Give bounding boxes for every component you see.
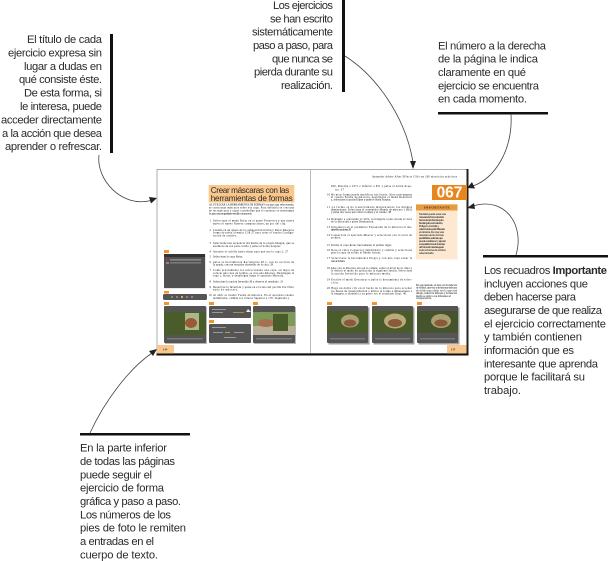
left page body text: Seleccione la opción Invertida 30 y observe el resultado. 31 bbox=[213, 280, 284, 283]
left page body text: nada de máscara. bbox=[213, 289, 238, 292]
callout: bottom step strip: ejercicio de forma bbox=[80, 483, 165, 495]
left page body text: Arrastre el cubillo hasta situar para que sea la capa 2. 27 bbox=[213, 250, 289, 254]
important callout box: Rectángulo redondeado, bbox=[419, 221, 443, 225]
arrow: to right page header bbox=[345, 56, 416, 169]
left page body text: Cuando en un ajuste de la composición inicial y Rotar máscaras bbox=[213, 229, 294, 232]
callout: bottom step strip: a entradas en el bbox=[80, 536, 154, 548]
important callout box: en la barra. Es muy una bbox=[419, 230, 445, 234]
right page body text bbox=[327, 185, 413, 296]
callout: step by step bbox=[252, 0, 345, 92]
callout: exercise number: claramente en qué bbox=[438, 67, 526, 79]
right page body text: 12 Rodando e ajustando al 20%, rectángulo todos desde el área bbox=[327, 218, 413, 221]
left page body text: Al abrir el cuadro Forma de máscara. En el apartado Cuadro bbox=[213, 294, 295, 297]
left page title bbox=[209, 185, 294, 203]
callout: important boxes: Los recuadros Importante bbox=[484, 265, 607, 277]
left page number tab bbox=[157, 345, 174, 354]
important callout box: de Forma de máscara, ajuste bbox=[419, 245, 445, 249]
left page body text: Desactive la Invertida y pulse en el icono del pocillo Por filtro bbox=[213, 286, 295, 289]
important callout box: en aquella forma de máscara bbox=[419, 242, 446, 246]
left page body text: delimitador, cambie los valores Superior a 170, Izquierda y bbox=[213, 297, 290, 300]
left page body text: 5 bbox=[210, 256, 212, 258]
left page body text: pulse la herramienta Rectángulo 28 y, con su sección de bbox=[213, 261, 295, 264]
screenshot: inverted mask on photo bbox=[253, 302, 296, 344]
callout: important boxes: trabajo. bbox=[484, 385, 521, 397]
callout: bottom step strip: cuerpo de texto. bbox=[80, 549, 158, 561]
side caption: En este ajustado, el área con la máscara bbox=[416, 284, 458, 287]
right page body text: la opción Invertida para la máscara media. bbox=[331, 272, 391, 275]
right page body text: 19 Escribe el modo Desaturar y pulse la herramienta de selec- bbox=[327, 278, 412, 282]
arrow: to page bottom bbox=[90, 349, 157, 433]
callout: bottom step strip: gráfica y paso a paso. bbox=[80, 496, 181, 508]
screenshot: oval mask 3 bbox=[417, 302, 460, 344]
important callout box: máscara de forma desde la bbox=[419, 215, 445, 219]
screenshot: oval mask 1 bbox=[327, 302, 370, 344]
left page body text: colocar una capa de formas, se crea una máscara. Despliegue la bbox=[213, 272, 295, 275]
callout: exercise title: De esta forma, si bbox=[24, 88, 102, 100]
left page body text: nueva el nuevo Nuevas composiciones, un por del clip. bbox=[213, 222, 286, 225]
callout: important boxes: asegurarse de que realiza bbox=[484, 305, 603, 317]
callout: important boxes: deben hacerse para bbox=[484, 292, 577, 304]
side caption bbox=[416, 284, 458, 300]
important callout box bbox=[416, 204, 458, 260]
important callout box: seleccione la opción Máscara bbox=[419, 227, 446, 231]
callout: exercise title bbox=[1, 34, 113, 153]
exercise number box: 067 bbox=[437, 185, 462, 202]
callout: step by step: pierda durante su bbox=[254, 67, 333, 79]
right page body text: la imagen, y diseñela a su gusto ver el resultado final. 40 bbox=[331, 293, 407, 296]
callout: exercise number: de la página le indica bbox=[438, 54, 539, 66]
left page body text: capa 1, Rotar, y despliegue luego el apartado Máscara. bbox=[213, 275, 284, 278]
left page body text: ración de archivo. bbox=[213, 234, 237, 237]
left page body text: AL UTILIZAR LA HERRAMIENTA DE FORMAS con una capa seleccionada, bbox=[209, 204, 294, 206]
right page body text: 15 Oculte la capa Rotar nuevamente al primer lugar. bbox=[327, 244, 392, 247]
callout: step by step: paso a paso, para bbox=[253, 40, 334, 52]
left page title: Crear máscaras con las bbox=[211, 186, 289, 195]
right page screenshots bbox=[327, 302, 460, 344]
left page body text: de las máscaras a capas o predefine que el contorno se interrumpa bbox=[209, 209, 295, 212]
side caption: transparencia. bbox=[416, 297, 432, 300]
callout: important boxes: incluyen acciones que bbox=[484, 278, 588, 290]
left page body text: 8 bbox=[210, 280, 212, 283]
left page body text: fe, para crear un gradiente sencillo con una sola. bbox=[209, 212, 252, 215]
left page body text: 9 bbox=[210, 286, 212, 289]
right page body text: 11 La forma se ha transformado manteniendo las mismas bbox=[327, 206, 412, 209]
left page body text: 3 bbox=[210, 242, 212, 245]
arrow: to exercise number bbox=[467, 114, 511, 188]
callout: bottom step strip: Los números de los bbox=[80, 509, 171, 521]
important callout box: Polígono, Estrella y bbox=[419, 224, 440, 228]
callout: exercise number: en cada momento. bbox=[438, 94, 527, 106]
left page body text: Seleccione la capa Rotar. bbox=[213, 256, 243, 258]
callout: important boxes bbox=[483, 255, 608, 397]
callout: important boxes: y también contienen bbox=[484, 332, 582, 344]
callout: bottom step strip: En la parte inferior bbox=[80, 443, 167, 455]
callout: exercise title: aprender o refrescar. bbox=[5, 141, 102, 153]
right page body text: para la capa de sólido el Medio Actuar. bbox=[331, 252, 381, 255]
left page body text: 10 bbox=[209, 294, 212, 297]
callout: important boxes: el ejercicio correctamente bbox=[484, 318, 606, 330]
left page body text: la ayuda, crea un recuadro alrededor de la cara. 29 bbox=[213, 264, 274, 267]
screenshot: layers panel bbox=[164, 250, 206, 288]
right page body text: los líneas de transformación y utilice la forma a dimensiones a bbox=[331, 290, 413, 293]
right page body text: 16 Rote el valor Conservar delimitador y cambie y seleccione bbox=[327, 249, 413, 252]
book spread bbox=[156, 169, 468, 356]
left page body text: 2 bbox=[210, 229, 212, 232]
left page body text: 6 bbox=[210, 261, 212, 264]
left page body text: Seleccione el menú Rotar en el panel Proyectos y una nueva bbox=[213, 220, 295, 223]
right page body text: 400. Diseche a 1071 e Inferior a 951 y pulse el botón Acep- bbox=[331, 185, 412, 188]
important callout box: máscara de las formas bbox=[419, 233, 445, 237]
right page body text: y pulse dos veces para abrir el ajuste y el cuadro. 38 bbox=[331, 211, 392, 214]
callout: step by step: realización. bbox=[281, 80, 333, 92]
important callout box: IMPORTANTE bbox=[424, 206, 450, 210]
right page header: Aprender Adobe After Effects CS6 con 100 ejercicios prácticos bbox=[372, 176, 457, 178]
left page title: herramientas de formas bbox=[211, 194, 293, 203]
important callout box: predefinidas, además, que bbox=[419, 236, 444, 240]
callout: exercise number: ejercicio se encuentra bbox=[438, 80, 540, 92]
callout: step by step: que nunca se bbox=[272, 53, 333, 65]
left page screenshots bbox=[163, 250, 296, 344]
left page body text bbox=[209, 204, 295, 300]
callout: bottom step strip: puede seguir el bbox=[80, 469, 152, 481]
right page body text: 14 Conservate el apartado Mezcar y seleccione con la tecla de bbox=[327, 234, 413, 237]
side caption: media se aplica con diferentes al bbox=[416, 295, 451, 298]
side caption: de sólido para dejar ver lo que está bbox=[416, 289, 458, 292]
left page number tab: 144 bbox=[163, 348, 168, 352]
important callout box: seleccionado. bbox=[419, 251, 434, 255]
right page body text: 20 Haga un doble clic en el borde de la máscara para acceder bbox=[327, 287, 412, 290]
callout: exercise number: El número a la derecha bbox=[438, 40, 547, 52]
callout: exercise title: El título de cada bbox=[27, 34, 103, 46]
left page body text: 7 bbox=[210, 269, 212, 272]
callout: exercise title: ejercicio expresa sin bbox=[8, 47, 102, 59]
callout: bottom step strip bbox=[80, 433, 190, 561]
callout: step by step: Los ejercicios bbox=[273, 0, 333, 12]
callout: important boxes: porque le facilitará su bbox=[484, 372, 585, 384]
left page body text: Seleccione una secuencia del medio de la propia imagen, que se bbox=[213, 242, 295, 245]
callout: bottom step strip: pies de foto le remiten bbox=[80, 523, 186, 535]
left page body text: 1 bbox=[210, 220, 212, 223]
right page number tab bbox=[447, 345, 466, 354]
side caption: de sólidos, una vez activada una máscara bbox=[416, 287, 458, 290]
right page body text: tar. 37 bbox=[335, 188, 345, 191]
important callout box: herramienta Rectángulo, bbox=[419, 218, 444, 222]
left page body text: 4 bbox=[210, 250, 212, 254]
screenshot: toolbar bbox=[163, 291, 207, 300]
callout: exercise title: lugar a dudas en bbox=[24, 61, 102, 73]
arrow: to exercise title bbox=[99, 155, 157, 204]
right page body text: dimensiones. Seleccione el contenedor Mundo de máscara 1 (M1) bbox=[331, 208, 412, 212]
right page body text: 13 Introduzca en el parámetro Expansión de la máscara el ma- bbox=[327, 226, 412, 229]
right page body text: nimo 80 y sea al visto. 39 bbox=[331, 229, 352, 232]
callout: exercise title: a la acción que desea bbox=[2, 128, 103, 140]
right page body text: 18 Ante con la máscara esta en la cabina, sobre el nivel de la cinta y bbox=[327, 267, 413, 270]
right page body text: de la filtración y pulse Destinación. bbox=[331, 221, 374, 224]
callout: important boxes: interesante que aprenda bbox=[484, 358, 599, 370]
side caption: debajo, reducir la máscara y la máscara bbox=[416, 292, 458, 295]
callout: exercise title: acceder directamente bbox=[1, 114, 102, 126]
callout: step by step: sistemáticamente bbox=[252, 27, 333, 39]
callout: important boxes: información que es bbox=[484, 345, 574, 357]
left page body text: se crean unas máscaras sobre esa capa. Para definirla se crea una bbox=[209, 206, 295, 210]
screenshot: mask shape dialog bbox=[209, 302, 251, 343]
right page number tab: 147 bbox=[451, 348, 456, 352]
callout: bottom step strip: de todas las páginas bbox=[80, 456, 175, 468]
right page body text: cara de la chica. bbox=[331, 260, 345, 263]
right page body text: le definir el modo de aplicación la siguiente fusión. Seleccione bbox=[331, 270, 413, 273]
left page body text: establece de esa parte arriba y pulse el botón Aceptar. bbox=[213, 245, 281, 248]
screenshot: composition with rectangle bbox=[164, 302, 207, 344]
right page body text: 17 Seleccione la herramienta Elegir y con una capa saber la bbox=[327, 257, 413, 260]
important callout box: También puede crear una bbox=[419, 212, 447, 216]
screenshot: oval mask 2 bbox=[372, 302, 414, 344]
callout: exercise title: qué consiste éste. bbox=[19, 74, 102, 86]
callout: step by step: se han escrito bbox=[270, 13, 333, 25]
callout: exercise title: le interesa, puede bbox=[20, 101, 102, 113]
important callout box: puede establecer y ajustar bbox=[419, 239, 446, 243]
right page body text: a, seleccione la opción Elipse y pulse el botón Aceptar. bbox=[331, 199, 391, 202]
right page body text: archivo. bbox=[331, 237, 341, 240]
right page body text: ción. bbox=[331, 281, 339, 284]
callout: exercise number bbox=[438, 40, 548, 114]
left page body text: Como previamente los seleccionado una capa, en lugar de bbox=[213, 269, 295, 272]
right page body text: 10 Ha m/as forma puede modificar sus líneas. Abra nuevamente bbox=[327, 194, 413, 197]
important callout box: todo la forma de archivo bbox=[419, 248, 446, 252]
left page body text: forma de pulse al mejor CS6 27 para crear el cuadro Configu- bbox=[213, 232, 294, 235]
arrow: to important box bbox=[467, 203, 518, 255]
right page body text: el cuadro Forma de máscara, despliegue el menú Redefinir bbox=[331, 196, 412, 199]
